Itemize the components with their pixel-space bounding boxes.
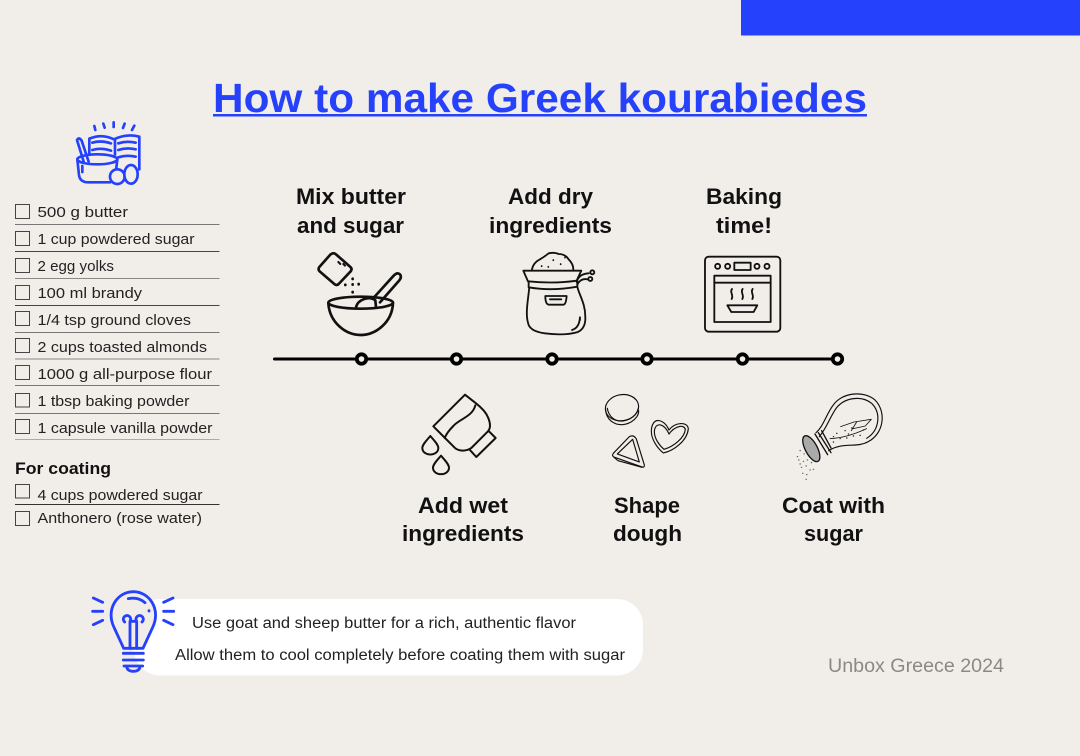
step heading: shape dough: [613, 493, 682, 546]
icon: flour sack: [523, 253, 594, 334]
icon: oven: [705, 257, 780, 332]
step heading: add dry ingredients: ingredients: [489, 213, 612, 238]
item: baking powder: 1 tbsp baking powder: [38, 393, 190, 410]
timeline node 3: [547, 354, 557, 364]
icon: recipe book and mixing bowl: [77, 122, 139, 184]
item: ground cloves: 1/4 tsp ground cloves: [38, 312, 191, 329]
item: ground cloves: [15, 312, 220, 332]
item: flour: 1000 g all-purpose flour: [38, 366, 212, 383]
step heading: coat with sugar: Coat with: [782, 493, 885, 518]
item: vanilla powder: 1 capsule vanilla powder: [38, 420, 212, 437]
timeline: [273, 354, 842, 364]
tip one: Use goat and sheep butter for a rich, authentic flavor: [192, 615, 576, 632]
item: coating sugar: [15, 484, 220, 504]
icon: mixing bowl with shaker: [319, 253, 401, 335]
item: egg yolks: 2 egg yolks: [38, 258, 114, 275]
item: powdered sugar: [15, 231, 220, 252]
step heading: coat with sugar: [782, 493, 885, 546]
item: 500 g butter: 500 g butter: [38, 204, 128, 221]
item: vanilla powder: [15, 420, 220, 440]
credit: Unbox Greece 2024: [828, 656, 1004, 677]
step heading: mix butter and sugar: Mix butter: [296, 184, 406, 209]
panel: tips: [134, 599, 643, 676]
item: toasted almonds: [15, 338, 220, 359]
icon: light bulb: [93, 592, 174, 671]
step heading: add wet ingredients: Add wet: [418, 493, 509, 518]
tip two: Allow them to cool completely before coating them with sugar: [175, 647, 625, 664]
step heading: add wet ingredients: ingredients: [402, 521, 524, 546]
step heading: mix butter and sugar: [296, 184, 406, 238]
step heading: mix butter and sugar: and sugar: [297, 213, 404, 238]
ingredient checklist: [15, 204, 220, 527]
step heading: baking time: [706, 184, 782, 238]
icon: cookie cutters: [603, 392, 688, 467]
step heading: add wet ingredients: [402, 493, 524, 546]
blue corner banner: [741, 0, 1080, 36]
item: egg yolks: [15, 258, 220, 278]
item: brandy: [15, 285, 220, 306]
item: baking powder: [15, 393, 220, 414]
timeline node 2: [452, 354, 461, 364]
title: How to make Greek kourabiedes: [213, 75, 867, 121]
item: coating sugar: 4 cups powdered sugar: [38, 487, 202, 504]
step heading: add dry ingredients: [489, 184, 612, 238]
item: toasted almonds: 2 cups toasted almonds: [38, 339, 207, 356]
coating heading: For coating: [15, 459, 111, 478]
item: flour: [15, 366, 220, 386]
item: powdered sugar: 1 cup powdered sugar: [38, 231, 194, 248]
step heading: baking time: time!: [716, 213, 772, 238]
timeline node 1: [357, 354, 366, 364]
item: rose water: Anthonero (rose water): [38, 510, 202, 527]
timeline node 4: [642, 354, 652, 364]
icon: salt shaker: [797, 394, 882, 479]
icon: pouring cup with drops: [422, 395, 496, 474]
item: 500 g butter: [15, 204, 220, 224]
timeline node 6: [833, 354, 842, 364]
item: brandy: 100 ml brandy: [38, 285, 143, 302]
step heading: shape dough: dough: [613, 521, 682, 546]
step heading: shape dough: Shape: [614, 493, 680, 518]
step heading: add dry ingredients: Add dry: [508, 184, 594, 209]
timeline node 5: [738, 354, 747, 364]
step heading: coat with sugar: sugar: [804, 521, 863, 546]
step heading: baking time: Baking: [706, 184, 782, 209]
